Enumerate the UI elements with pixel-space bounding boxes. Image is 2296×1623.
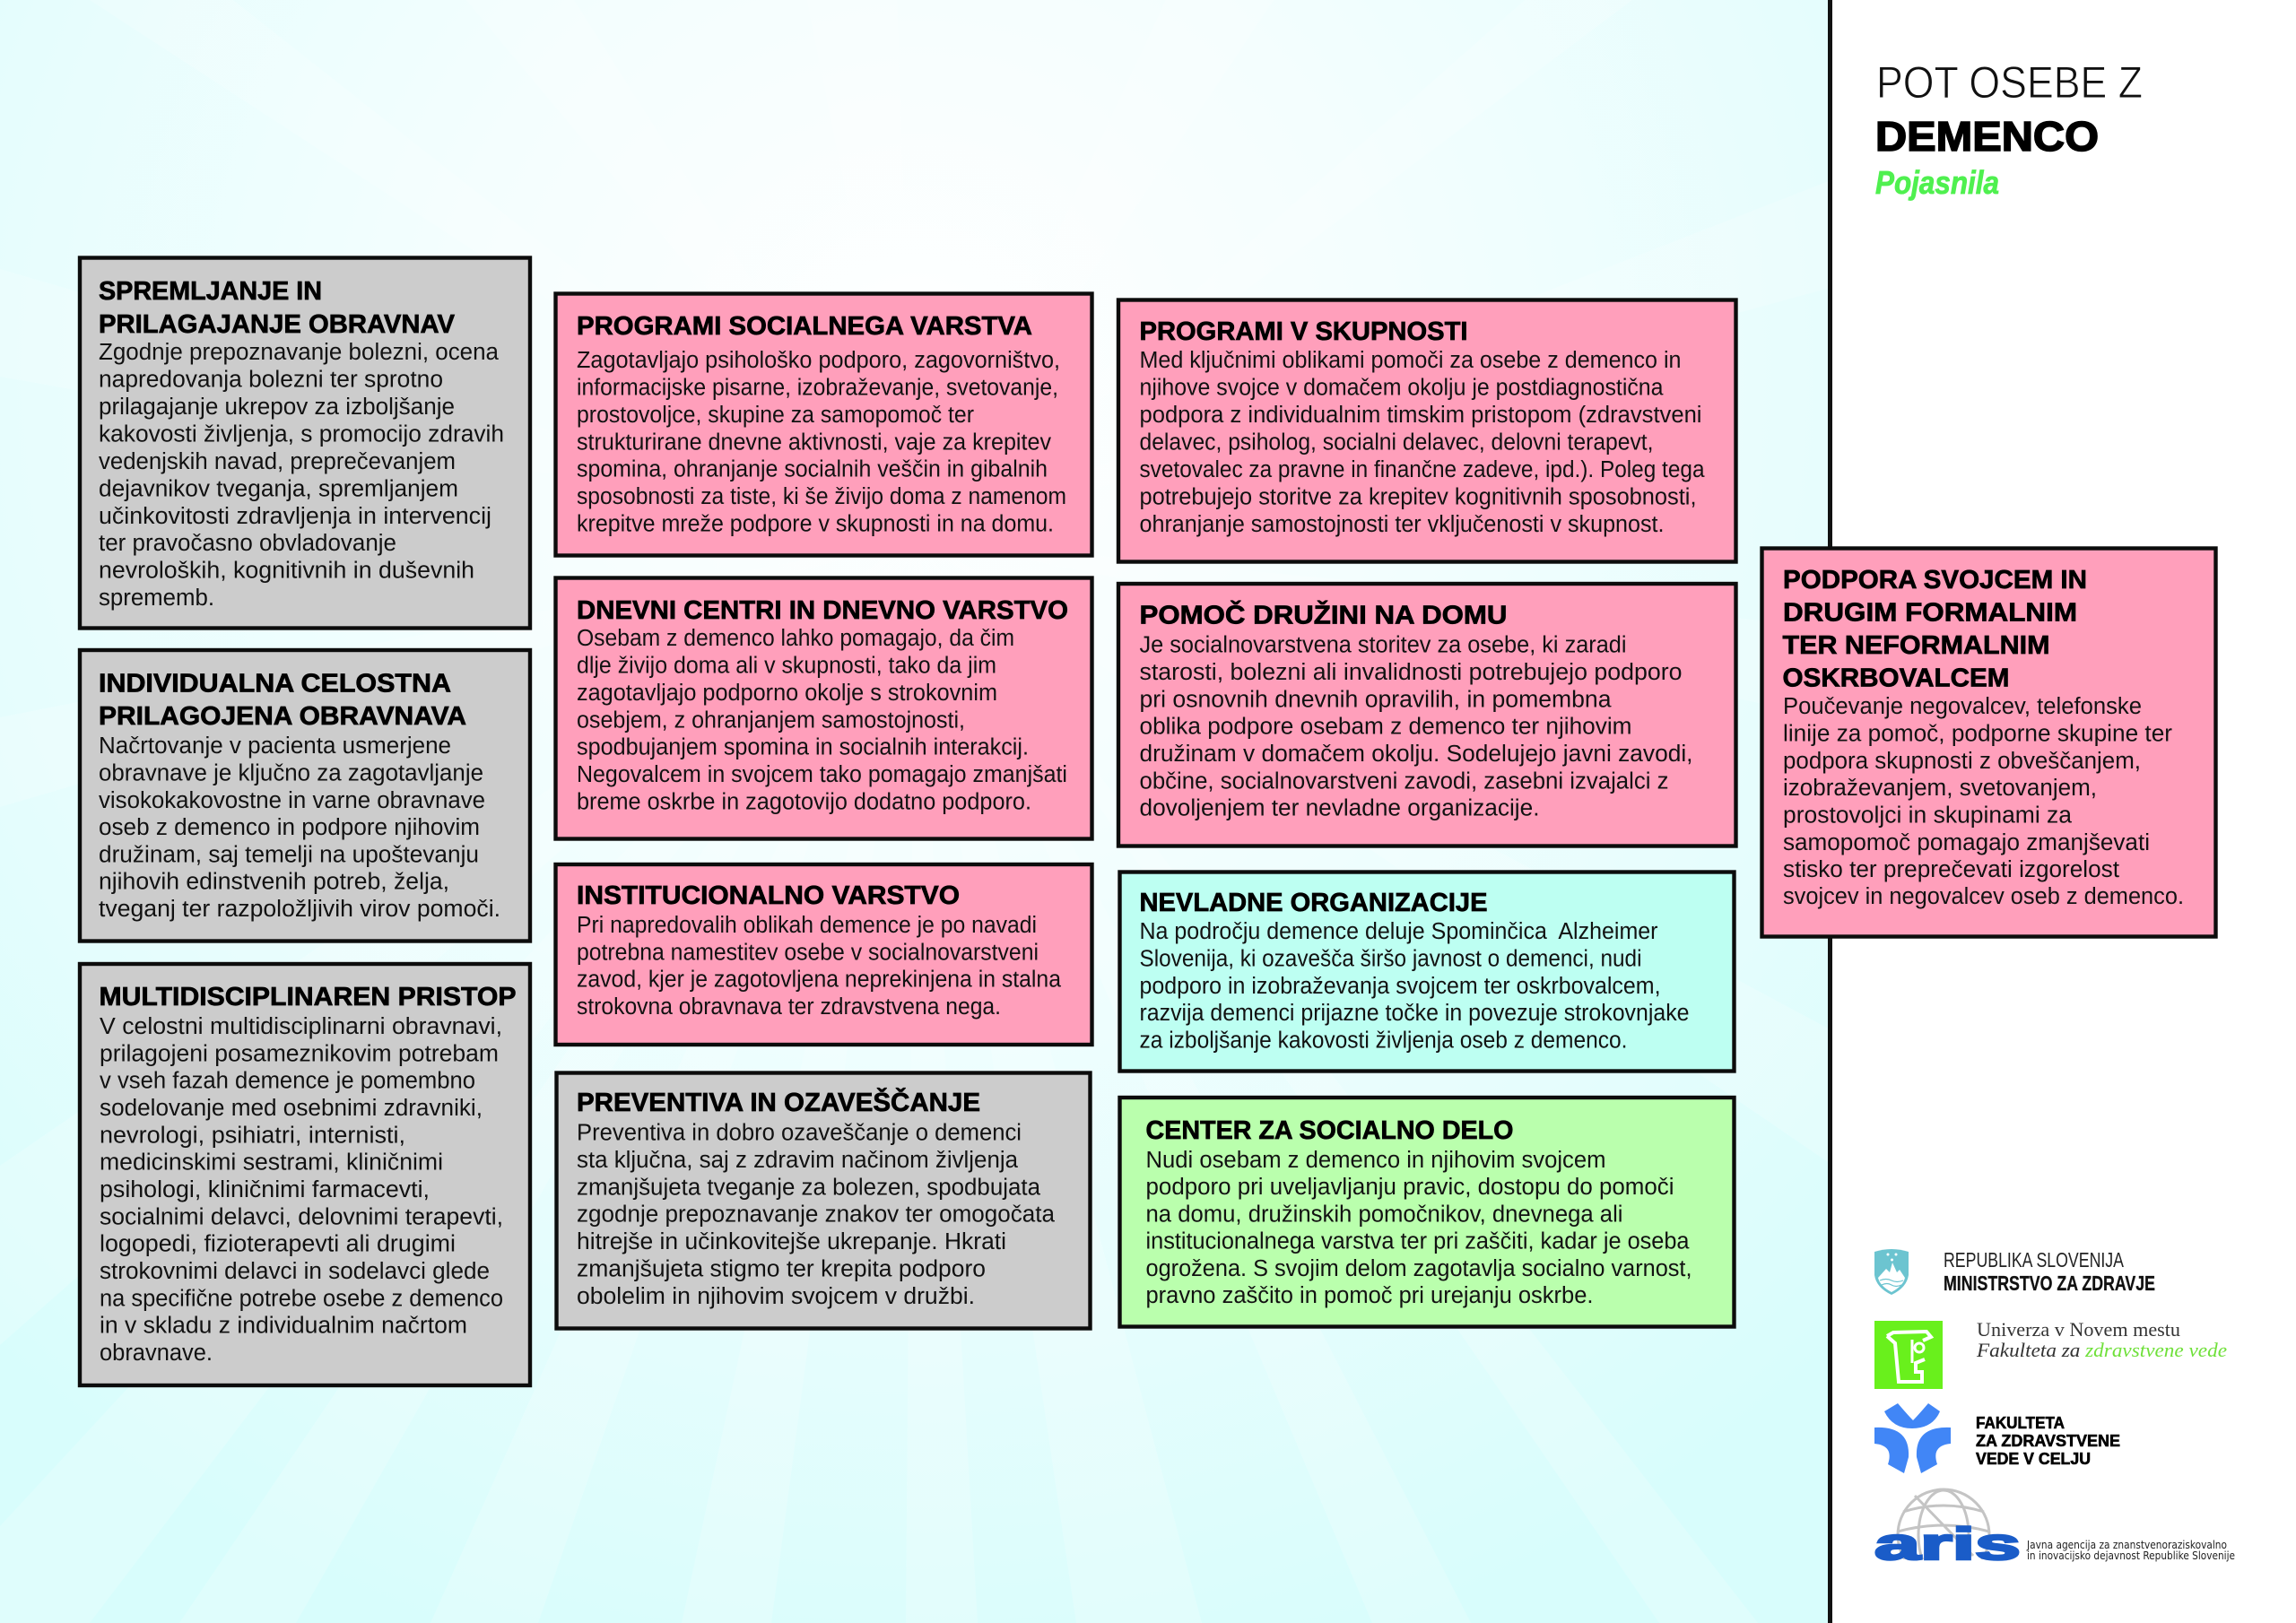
body text: na specifične potrebe osebe z demenco [100, 1286, 503, 1311]
body text: sprememb. [99, 586, 214, 611]
panel: preventiva in ozaveščanje [556, 1072, 1091, 1329]
body text: Med ključnimi oblikami pomoči za osebe z demenco in [1139, 348, 1681, 373]
title: Pojasnila [1875, 164, 1999, 201]
body text [1783, 694, 2184, 909]
body text: občine, socialnovarstveni zavodi, zasebni izvajalci z [1139, 768, 1668, 794]
body text: strokovna obravnava ter zdravstvena nega. [577, 994, 1001, 1020]
body text: ogrožena. S svojim delom zagotavlja socialno varnost, [1146, 1256, 1692, 1281]
body text: Preventiva in dobro ozaveščanje o demenci [577, 1121, 1022, 1146]
logo: Fakulteta za zdravstvene vede v Celju: ZA ZDRAVSTVENE [1976, 1432, 2120, 1450]
heading: INDIVIDUALNA CELOSTNA [99, 669, 451, 698]
body text: Na področju demence deluje Spominčica Alzheimer [1139, 919, 1658, 944]
body text: sposobnosti za tiste, ki še živijo doma z namenom [577, 484, 1066, 509]
sidebar divider line [1828, 0, 1832, 1623]
body text: dovoljenjem ter nevladne organizacije. [1139, 796, 1539, 821]
panel: center za socialno delo [1119, 1098, 1735, 1327]
heading: OSKRBOVALCEM [1783, 664, 2009, 693]
body text: Slovenija, ki ozavešča širšo javnost o demenci, nudi [1139, 946, 1641, 971]
body text: krepitve mreže podpore v skupnosti in na domu. [577, 511, 1054, 536]
icon: green square emblem [1874, 1321, 1943, 1389]
body text: psihologi, kliničnimi farmacevti, [100, 1177, 430, 1202]
logo: Republika Slovenija, Ministrstvo za zdravje [1874, 1248, 2155, 1295]
panel: nevladne organizacije [1119, 872, 1735, 1071]
body text: prostovoljci in skupinami za [1783, 803, 2073, 829]
body text: delavec, psiholog, socialni delavec, delovni terapevt, [1139, 430, 1654, 456]
body text: družinam v domačem okolju. Sodelujejo javni zavodi, [1139, 742, 1693, 767]
heading: DRUGIM FORMALNIM [1783, 599, 2077, 628]
body text [100, 1014, 503, 1366]
body text: logopedi, fizioterapevti ali drugimi [100, 1232, 456, 1257]
body text: podpora z individualnim timskim pristopom (zdravstveni [1139, 403, 1702, 428]
body text: hitrejše in učinkovitejše ukrepanje. Hkrati [577, 1229, 1006, 1254]
heading [99, 669, 466, 731]
icon: coat of arms shield [1874, 1249, 1909, 1295]
body text: medicinskimi sestrami, kliničnimi [100, 1150, 443, 1176]
body text: breme oskrbe in zagotovijo dodatno podporo. [577, 789, 1031, 814]
logo: Univerza v Novem mestu: Fakulteta za zdravstvene vede [1976, 1339, 2227, 1361]
body text: njihovih edinstvenih potreb, želja, [99, 870, 449, 895]
body text: stisko ter preprečevati izgorelost [1783, 857, 2119, 882]
body text: pri osnovnih dnevnih opravilih, in pomembna [1139, 687, 1612, 712]
title [1875, 57, 2143, 201]
heading: MULTIDISCIPLINAREN PRISTOP [99, 983, 517, 1011]
heading: POMOČ DRUŽINI NA DOMU [1139, 599, 1507, 629]
body text: Negovalcem in svojcem tako pomagajo zmanjšati [577, 762, 1067, 787]
body text: podpora skupnosti z obveščanjem, [1783, 749, 2141, 774]
panel: programi v skupnosti [1118, 299, 1736, 561]
body text: V celostni multidisciplinarni obravnavi, [100, 1014, 502, 1039]
body text [1146, 1148, 1692, 1308]
body text: Zgodnje prepoznavanje bolezni, ocena [99, 340, 500, 365]
body text [577, 1121, 1056, 1309]
body text: Zagotavljajo psihološko podporo, zagovorništvo, [577, 348, 1060, 373]
body text: linije za pomoč, podporne skupine ter [1783, 721, 2173, 746]
body text: zgodnje prepoznavanje znakov ter omogočata [577, 1202, 1056, 1228]
body text: dlje živijo doma ali v skupnosti, tako da jim [577, 653, 996, 678]
body text: samopomoč pomagajo zmanjševati [1783, 830, 2150, 855]
body text: napredovanja bolezni ter sprotno [99, 368, 443, 393]
right white sidebar [1832, 0, 2296, 1623]
body text: ter pravočasno obvladovanje [99, 531, 396, 556]
body text [99, 733, 500, 922]
body text: nevrologi, psihiatri, internisti, [100, 1123, 405, 1148]
body text: Osebam z demenco lahko pomagajo, da čim [577, 626, 1014, 651]
body text: Poučevanje negovalcev, telefonske [1783, 694, 2142, 719]
heading: INSTITUCIONALNO VARSTVO [577, 881, 960, 910]
body text: pravno zaščito in pomoč pri urejanju oskrbe. [1146, 1283, 1593, 1308]
logo: Fakulteta za zdravstvene vede v Celju: VEDE V CELJU [1976, 1450, 2091, 1468]
panel: pomoč družini na domu [1118, 584, 1736, 846]
body text: nevroloških, kognitivnih in duševnih [99, 558, 474, 583]
body text: vedenjskih navad, preprečevanjem [99, 449, 456, 474]
body text: sodelovanje med osebnimi zdravniki, [100, 1096, 483, 1121]
body text: kakovosti življenja, s promocijo zdravih [99, 421, 504, 447]
body text: oseb z demenco in podpore njihovim [99, 815, 480, 840]
body text: Je socialnovarstvena storitev za osebe, ki zaradi [1139, 633, 1627, 658]
heading: PREVENTIVA IN OZAVEŠČANJE [577, 1087, 980, 1117]
body text: za izboljšanje kakovosti življenja oseb z demenco. [1139, 1028, 1627, 1054]
body text: zavod, kjer je zagotovljena neprekinjena in stalna [577, 968, 1062, 993]
body text: starosti, bolezni ali invalidnosti potrebujejo podporo [1139, 660, 1683, 685]
panel: spremljanje in prilagajanje obravnav [80, 258, 530, 628]
icon: blue figure mark [1874, 1403, 1951, 1473]
body text [577, 626, 1067, 814]
body text: spodbujanjem spomina in socialnih interakcij. [577, 735, 1029, 760]
logo: Univerza v Novem mestu: Univerza v Novem mestu [1977, 1318, 2180, 1341]
body text [1139, 633, 1693, 821]
logo: Fakulteta za zdravstvene vede v Celju [1874, 1403, 2120, 1473]
background with rays [0, 0, 1833, 1623]
body text: prostovoljce, skupine za samopomoč ter [577, 403, 974, 428]
body text: prilagojeni posameznikovim potrebam [100, 1041, 499, 1066]
body text: strokovnimi delavci in sodelavci glede [100, 1259, 490, 1284]
logo: Fakulteta za zdravstvene vede v Celju: FAKULTETA [1976, 1414, 2065, 1432]
heading: PRILAGAJANJE OBRAVNAV [99, 310, 456, 339]
heading: NEVLADNE ORGANIZACIJE [1139, 889, 1487, 917]
logo: ARIS: in inovacijsko dejavnost Republike Slovenije [2027, 1549, 2235, 1562]
body text: Nudi osebam z demenco in njihovim svojcem [1146, 1148, 1605, 1173]
heading: PODPORA SVOJCEM IN [1783, 566, 2087, 595]
panel: institucionalno varstvo [556, 864, 1092, 1045]
heading: PRILAGOJENA OBRAVNAVA [99, 702, 466, 731]
icon: grey globe [1896, 1488, 1991, 1559]
body text: zmanjšujeta stigmo ter krepita podporo [577, 1257, 986, 1282]
body text: in v skladu z individualnim načrtom [100, 1314, 467, 1339]
body text: svetovalec za pravne in finančne zadeve, ipd.). Poleg tega [1139, 457, 1705, 482]
heading: DNEVNI CENTRI IN DNEVNO VARSTVO [577, 596, 1068, 625]
panel: programi socialnega varstva [556, 294, 1092, 556]
logo: Univerza v Novem mestu [1874, 1318, 2227, 1389]
body text: Načrtovanje v pacienta usmerjene [99, 733, 451, 759]
panel: individualna celostna prilagojena obravnava [80, 650, 530, 942]
logo: Republika Slovenija, Ministrstvo za zdravje: MINISTRSTVO ZA ZDRAVJE [1944, 1271, 2155, 1295]
body text: sta ključna, saj z zdravim načinom življenja [577, 1148, 1019, 1173]
body text: spomina, ohranjanje socialnih veščin in gibalnih [577, 457, 1048, 482]
body text: obravnave je ključno za zagotavljanje [99, 760, 483, 785]
body text: strukturirane dnevne aktivnosti, vaje za krepitev [577, 430, 1051, 455]
heading: CENTER ZA SOCIALNO DELO [1146, 1116, 1514, 1145]
body text: v vseh fazah demence je pomembno [100, 1069, 475, 1094]
logo: ARIS: Javna agencija za znanstvenoraziskovalno [2026, 1538, 2227, 1551]
title: POT OSEBE Z [1876, 57, 2143, 108]
body text: potrebna namestitev osebe v socialnovarstveni [577, 940, 1039, 965]
body text: oblika podpore osebam z demenco ter njihovim [1139, 715, 1632, 740]
body text: tveganj ter razpoložljivih virov pomoči. [99, 897, 500, 922]
body text: dejavnikov tveganja, spremljanjem [99, 477, 458, 502]
body text: obolelim in njihovim svojcem v družbi. [577, 1284, 975, 1309]
heading [1783, 566, 2087, 693]
heading: TER NEFORMALNIM [1783, 631, 2050, 660]
body text: ohranjanje samostojnosti ter vključenosti v skupnost. [1139, 512, 1665, 537]
body text: prilagajanje ukrepov za izboljšanje [99, 395, 455, 420]
body text [577, 348, 1066, 536]
heading: PROGRAMI V SKUPNOSTI [1139, 317, 1467, 346]
heading [99, 277, 456, 339]
body text: njihove svojce v domačem okolju je postdiagnostična [1139, 375, 1664, 400]
logo: ARIS [1874, 1488, 2235, 1562]
body text: visokokakovostne in varne obravnave [99, 788, 485, 813]
body text: obravnave. [100, 1341, 213, 1366]
heading: PROGRAMI SOCIALNEGA VARSTVA [577, 312, 1032, 341]
body text: socialnimi delavci, delovnimi terapevti, [100, 1204, 503, 1229]
body text: družinam, saj temelji na upoštevanju [99, 843, 479, 868]
body text: podporo pri uveljavljanju pravic, dostopu do pomoči [1146, 1175, 1674, 1200]
title: DEMENCO [1875, 113, 2099, 160]
body text: izobraževanjem, svetovanjem, [1783, 776, 2097, 801]
body text: učinkovitosti zdravljenja in intervencij [99, 504, 491, 529]
body text: razvija demenci prijazne točke in povezuje strokovnjake [1139, 1001, 1690, 1026]
panel: podpora svojcem in drugim formalnim ter neformalnim oskrbovalcem [1761, 549, 2215, 936]
panel: multidisciplinaren pristop [80, 964, 530, 1385]
body text: zmanjšujeta tveganje za bolezen, spodbujata [577, 1175, 1041, 1200]
body text [577, 913, 1062, 1020]
body text: na domu, družinskih pomočnikov, dnevnega ali [1146, 1202, 1623, 1227]
body text: Pri napredovalih oblikah demence je po navadi [577, 913, 1037, 938]
body text [1139, 919, 1690, 1054]
body text [1139, 348, 1705, 537]
body text: potrebujejo storitve za krepitev kognitivnih sposobnosti, [1139, 484, 1697, 509]
logo: Republika Slovenija, Ministrstvo za zdravje: REPUBLIKA SLOVENIJA [1944, 1248, 2125, 1271]
heading: SPREMLJANJE IN [99, 277, 322, 306]
panel: dnevni centri in dnevno varstvo [556, 577, 1092, 839]
body text: svojcev in negovalcev oseb z demenco. [1783, 884, 2184, 909]
body text: podporo in izobraževanja svojcem ter oskrbovalcem, [1139, 974, 1661, 999]
body text: zagotavljajo podporno okolje s strokovnim [577, 681, 997, 706]
body text: informacijske pisarne, izobraževanje, svetovanje, [577, 375, 1058, 400]
body text: institucionalnega varstva ter pri zaščiti, kadar je oseba [1146, 1229, 1690, 1254]
body text: osebjem, z ohranjanjem samostojnosti, [577, 707, 965, 733]
body text [99, 340, 504, 611]
logo: ARIS: aris [1874, 1519, 2021, 1569]
